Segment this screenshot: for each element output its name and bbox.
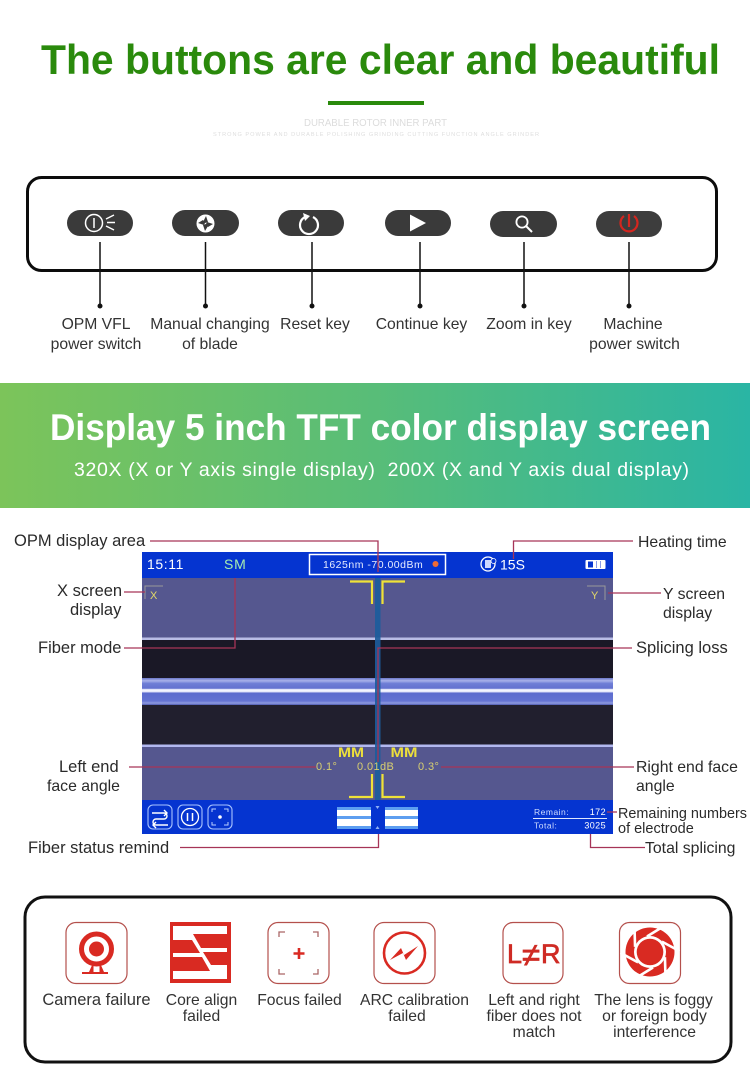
callout: OPM display area: OPM display area bbox=[14, 532, 146, 550]
callout: reset key: Reset key bbox=[280, 316, 350, 333]
status bar: SM bbox=[224, 556, 247, 572]
button: OPM VFL power switch bbox=[67, 210, 133, 236]
panel: fault reminders bbox=[25, 897, 731, 1062]
callout: heating time: Heating time bbox=[638, 534, 727, 551]
callout: manual changing of blade bbox=[150, 242, 270, 353]
callout: splicing loss: Splicing loss bbox=[636, 639, 728, 657]
bottom status bar: 3025 bbox=[584, 820, 606, 830]
button: continue key bbox=[385, 210, 451, 236]
fault: core align failed bbox=[166, 922, 237, 1025]
callout: heating time bbox=[514, 534, 727, 559]
Y marker: Y bbox=[591, 590, 599, 602]
X marker bbox=[145, 586, 163, 602]
callout: OPM VFL power switch: OPM VFL bbox=[62, 316, 131, 333]
callout: left end face angle: Left end bbox=[59, 758, 119, 776]
callout: fiber status remind bbox=[28, 834, 378, 857]
callout: OPM VFL power switch: power switch bbox=[51, 336, 141, 353]
status bar: 1625nm -70.00dBm bbox=[323, 559, 423, 571]
callout: Y screen display bbox=[608, 586, 725, 622]
Y marker bbox=[587, 586, 605, 602]
callout: fiber status remind: Fiber status remind bbox=[28, 839, 169, 857]
callout: continue key bbox=[376, 242, 467, 333]
fault: left and right fiber do not match: R bbox=[541, 939, 560, 969]
readouts: MM bbox=[338, 744, 364, 760]
fault: left and right fiber do not match: ≠ bbox=[522, 936, 540, 973]
callout: left end face angle: face angle bbox=[47, 778, 120, 795]
fault: core align failed: Core align bbox=[166, 992, 237, 1009]
callout: fiber mode bbox=[38, 578, 235, 657]
X marker: X bbox=[150, 590, 158, 602]
fault: left and right fiber do not match bbox=[486, 922, 582, 1041]
button: zoom in key bbox=[490, 211, 557, 237]
fault: focus failed bbox=[257, 922, 342, 1009]
bottom status bar bbox=[142, 800, 613, 834]
fault: core align failed: failed bbox=[183, 1008, 220, 1025]
status bar bbox=[142, 552, 613, 578]
fault: focus failed: Focus failed bbox=[257, 992, 342, 1009]
panel: button strip bbox=[28, 178, 716, 270]
banner heading: Display 5 inch TFT color display screen bbox=[50, 407, 711, 448]
callout: remaining numbers of electrode: of electrode bbox=[618, 821, 694, 837]
callout: zoom in key: Zoom in key bbox=[486, 316, 572, 333]
fault: lens foggy or foreign body: The lens is foggy bbox=[594, 992, 713, 1009]
callout: right end face angle: Right end face bbox=[636, 759, 738, 776]
fault: ARC calibration failed bbox=[360, 922, 469, 1025]
fault: lens foggy or foreign body: interference bbox=[613, 1024, 696, 1041]
callout: manual changing of blade: Manual changing bbox=[150, 316, 270, 333]
callout: fiber mode: Fiber mode bbox=[38, 639, 121, 657]
fault: ARC calibration failed: ARC calibration bbox=[360, 992, 469, 1009]
status bar: 15S bbox=[500, 556, 525, 572]
callout: reset key bbox=[280, 242, 350, 333]
readouts: 0.01dB bbox=[357, 761, 394, 773]
callout: Y screen display: Y screen bbox=[663, 586, 725, 603]
fault: lens foggy or foreign body: or foreign body bbox=[602, 1008, 707, 1025]
bottom status bar: 172 bbox=[590, 807, 606, 817]
readouts bbox=[316, 744, 439, 773]
callout: right end face angle bbox=[441, 759, 738, 795]
title: The buttons are clear and beautiful bbox=[41, 36, 720, 83]
readouts: 0.1° bbox=[316, 761, 337, 773]
button: machine power switch bbox=[596, 211, 662, 237]
button: manual changing of blade bbox=[172, 210, 239, 236]
banner subtitle: 320X (X or Y axis single display) 200X (X and Y axis dual display) bbox=[74, 459, 689, 481]
callout: machine power switch: power switch bbox=[589, 336, 680, 353]
bottom status bar: Remain: bbox=[534, 807, 569, 817]
fault: left and right fiber do not match: fiber does not bbox=[486, 1008, 582, 1025]
splice seam bbox=[375, 578, 380, 800]
fault: left and right fiber do not match: match bbox=[513, 1024, 555, 1041]
callout: remaining numbers of electrode: Remaining numbers bbox=[618, 806, 747, 822]
callout: zoom in key bbox=[486, 242, 572, 333]
callout: OPM display area bbox=[14, 532, 378, 572]
fault: camera failure: Camera failure bbox=[42, 991, 151, 1009]
title accent bar bbox=[328, 101, 424, 105]
readouts: 0.3° bbox=[418, 761, 439, 773]
fault: left and right fiber do not match: L bbox=[507, 939, 522, 969]
callout: continue key: Continue key bbox=[376, 316, 467, 333]
callout: Y screen display: display bbox=[663, 605, 712, 622]
faint subtitle: DURABLE ROTOR INNER PART bbox=[304, 118, 447, 129]
lower fiber shadow bbox=[142, 705, 613, 745]
callout: machine power switch: Machine bbox=[603, 316, 663, 333]
faint subtitle: STRONG POWER AND DURABLE POLISHING GRINDING CUTTING FUNCTION ANGLE GRINDER bbox=[213, 132, 539, 138]
upper fiber shadow bbox=[142, 640, 613, 679]
fault: lens foggy or foreign body bbox=[594, 922, 713, 1041]
callout: manual changing of blade: of blade bbox=[182, 336, 238, 353]
callout: total splicing bbox=[590, 834, 735, 857]
callout: X screen display: X screen bbox=[57, 582, 122, 600]
fault: left and right fiber do not match: Left and right bbox=[488, 992, 580, 1009]
status bar: 15:11 bbox=[147, 556, 184, 572]
yellow guide brackets bbox=[349, 582, 405, 797]
callout: total splicing: Total splicing bbox=[645, 840, 735, 857]
fault: camera failure bbox=[42, 922, 151, 1009]
button: reset key bbox=[278, 210, 344, 236]
callout: left end face angle bbox=[47, 758, 316, 795]
fiber core band bbox=[142, 678, 613, 705]
banner: display bbox=[0, 383, 750, 508]
callout: X screen display: display bbox=[70, 601, 122, 619]
callout: machine power switch bbox=[589, 242, 680, 353]
faint subtitle bbox=[213, 118, 539, 138]
callout: remaining numbers of electrode bbox=[607, 806, 747, 837]
screen bbox=[142, 552, 613, 834]
readouts: MM bbox=[390, 744, 418, 760]
callout: splicing loss bbox=[378, 639, 728, 762]
callout: X screen display bbox=[57, 582, 145, 619]
callout: right end face angle: angle bbox=[636, 778, 675, 795]
bottom status bar: Total: bbox=[534, 820, 557, 830]
fault: ARC calibration failed: failed bbox=[388, 1008, 426, 1025]
callout: OPM VFL power switch bbox=[51, 242, 141, 353]
